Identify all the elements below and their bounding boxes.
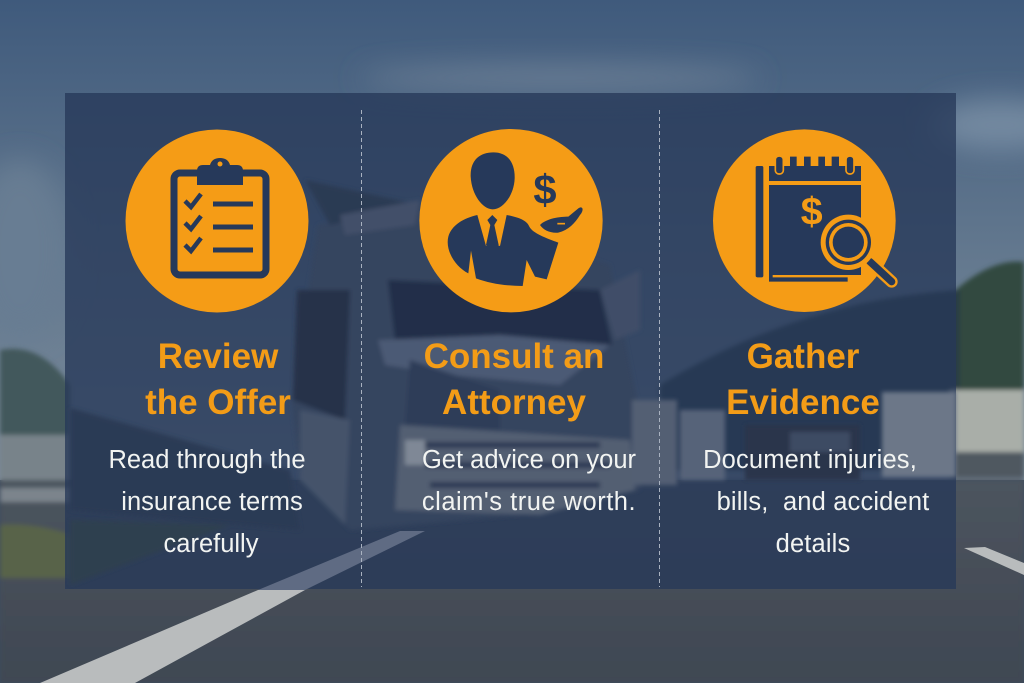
heading: the Offer: [145, 383, 291, 422]
heading: Gather: [747, 337, 859, 376]
panel: consult an attorney: [419, 129, 636, 516]
body text: [422, 446, 636, 516]
panel: gather evidence: [703, 129, 930, 558]
body text: [108, 446, 306, 558]
heading: Consult an: [424, 337, 604, 376]
heading: Review: [158, 337, 278, 376]
body text: [703, 446, 930, 558]
body text: bills, and accident: [717, 488, 929, 516]
icon: attorney with dollar: $: [533, 166, 557, 213]
road markings: [40, 547, 1024, 683]
panel: review the offer: [108, 130, 308, 558]
body text: carefully: [164, 530, 258, 558]
body text: Read through the: [108, 446, 306, 474]
heading: Evidence: [726, 383, 880, 422]
translucent navy panel: [65, 93, 956, 589]
icon: clipboard checklist: [126, 130, 308, 312]
body text: claim's true worth.: [422, 488, 636, 516]
heading: [424, 337, 604, 422]
body text: Document injuries,: [703, 446, 917, 474]
heading: [145, 337, 291, 422]
road marking inside panel: [258, 531, 425, 590]
icon: calendar with magnifier: $: [801, 189, 823, 233]
body text: Get advice on your: [422, 446, 636, 474]
body text: details: [776, 530, 850, 558]
icon: calendar with magnifier: [713, 129, 898, 312]
heading: Attorney: [442, 383, 586, 422]
body text: insurance terms: [121, 488, 303, 516]
icon: attorney with dollar: [419, 129, 603, 312]
heading: [726, 337, 880, 422]
